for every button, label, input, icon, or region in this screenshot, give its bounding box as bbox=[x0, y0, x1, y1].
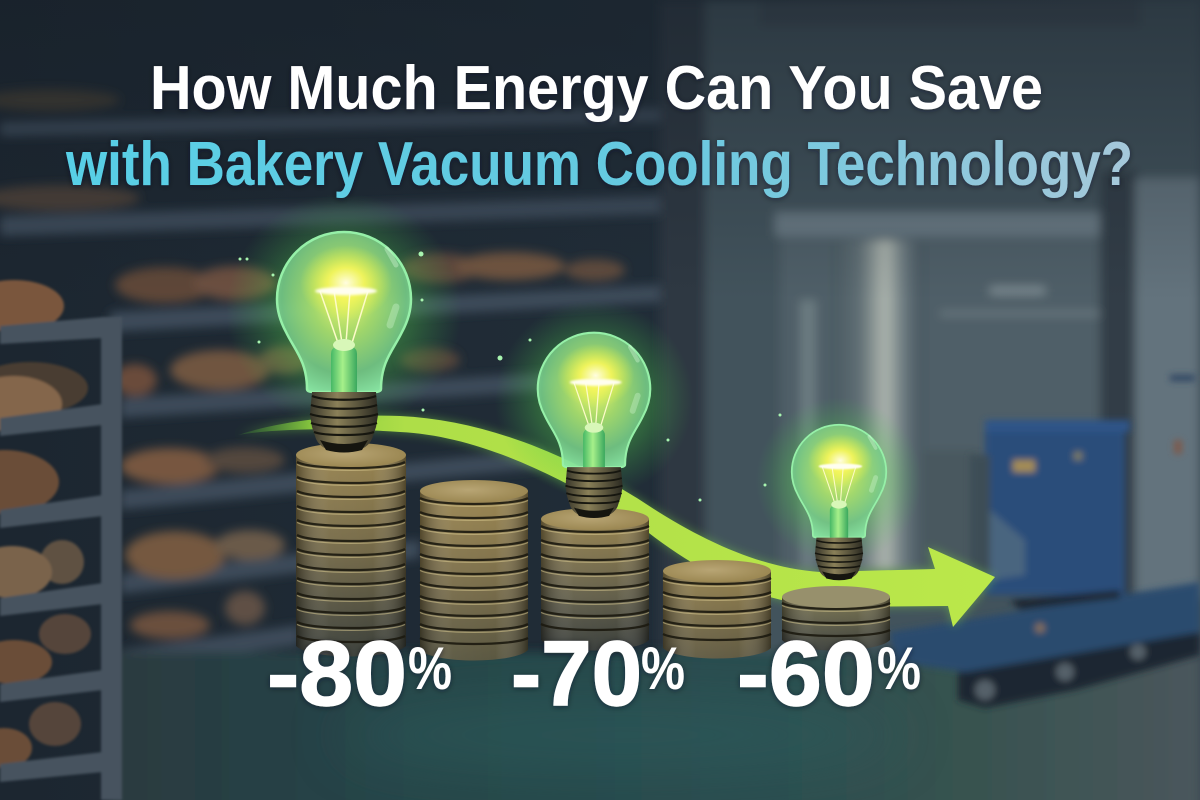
coin stack 5 bbox=[782, 586, 890, 650]
title: two-line heading: How Much Energy Can You Save bbox=[150, 54, 1043, 123]
chart: coin stacks bbox=[296, 443, 890, 660]
icon: medium glowing light bulb bbox=[495, 300, 693, 518]
coin stack 1 bbox=[296, 443, 406, 656]
stat: minus 60 percent: % bbox=[877, 635, 921, 702]
foreground loaves bbox=[0, 280, 91, 768]
foreground rack bbox=[0, 317, 122, 800]
blue platform and box bbox=[958, 632, 1200, 708]
sparkles around the bulbs bbox=[238, 252, 782, 502]
stat: minus 80 percent: % bbox=[408, 635, 452, 702]
arrow: green downward savings trend bbox=[238, 416, 995, 627]
icon: large glowing light bulb bbox=[226, 193, 462, 452]
coin stack 3 bbox=[541, 508, 649, 650]
coin stack 4 bbox=[663, 560, 771, 658]
stat: minus 80 percent: -80 bbox=[267, 623, 407, 725]
stat: minus 60 percent: -60 bbox=[737, 623, 875, 725]
stat: minus 70 percent: % bbox=[641, 635, 685, 702]
stat: minus 70 percent: -70 bbox=[511, 623, 642, 725]
coin stack 2 bbox=[420, 480, 528, 660]
title: two-line heading bbox=[65, 54, 1133, 199]
icon: small glowing light bulb bbox=[756, 397, 922, 580]
